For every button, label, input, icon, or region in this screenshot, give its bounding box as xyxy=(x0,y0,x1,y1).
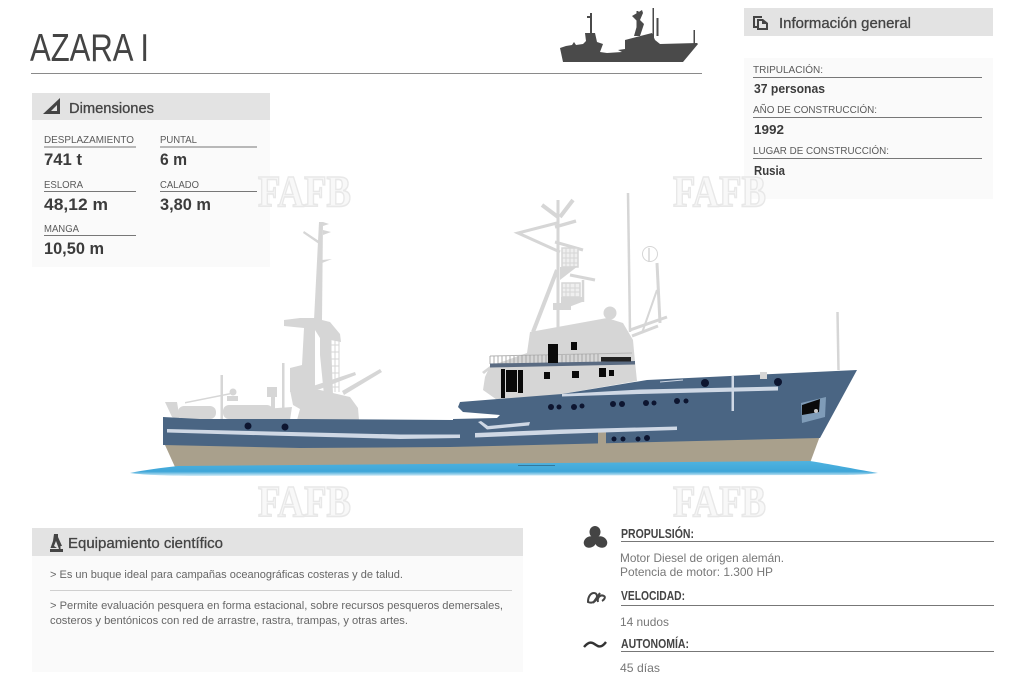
field: ano de construccion xyxy=(753,103,982,137)
mast platforms xyxy=(553,248,582,310)
text: motor: Motor Diesel de origen alemán. xyxy=(620,551,784,565)
heading: propulsion: PROPULSIÓN: xyxy=(621,526,694,541)
watermark: FAFB bottom left: FAFB xyxy=(258,477,351,526)
icon: microscope xyxy=(50,534,63,552)
field: eslora: 48,12 m xyxy=(44,196,108,214)
section: autonomia xyxy=(584,636,994,675)
text: evaluacion: costeros y bentónicos con red de arrastre, rastra, trampas, y otras artes. xyxy=(50,615,408,627)
field: tripulacion: TRIPULACIÓN: xyxy=(753,63,823,76)
ship illustration xyxy=(130,193,878,476)
hull upper: blue xyxy=(163,370,857,448)
field: calado: CALADO xyxy=(160,179,199,191)
field: lugar de construccion: Rusia xyxy=(754,163,786,178)
windows xyxy=(501,342,614,398)
watermark: FAFB bottom right: FAFB xyxy=(673,477,766,526)
keel shadow xyxy=(518,465,555,466)
field: manga xyxy=(44,223,136,258)
field: manga: MANGA xyxy=(44,223,79,235)
superstructure xyxy=(482,306,637,402)
panel: equipamiento cientifico xyxy=(32,528,523,672)
field: desplazamiento xyxy=(44,134,136,169)
field: ano de construccion: AÑO DE CONSTRUCCIÓN: xyxy=(753,103,877,116)
field: tripulacion xyxy=(753,63,982,96)
watermark: FAFB top left: FAFB xyxy=(258,167,351,216)
field: manga: 10,50 m xyxy=(44,240,104,258)
tan tab xyxy=(598,431,606,445)
icon: wave xyxy=(584,642,606,647)
text: evaluacion: > Permite evaluación pesquera en forma estacional, sobre recursos pesqueros demersales, xyxy=(50,600,503,612)
heading: dimensiones: Dimensiones xyxy=(69,100,154,117)
field: eslora: ESLORA xyxy=(44,179,83,191)
field: lugar de construccion: LUGAR DE CONSTRUCCIÓN: xyxy=(753,144,889,157)
section: propulsion xyxy=(582,526,994,579)
heading: informacion general: Información general xyxy=(779,15,911,32)
anchor hawse xyxy=(801,397,826,423)
field: ano de construccion: 1992 xyxy=(754,122,784,137)
section: velocidad xyxy=(588,589,994,629)
field: eslora xyxy=(44,179,136,214)
heading: equipamiento cientifico: Equipamiento científico xyxy=(68,535,223,552)
text: motor xyxy=(620,551,784,579)
icon: documents xyxy=(753,16,768,30)
icon: propeller xyxy=(582,526,609,550)
hull stripes xyxy=(167,372,778,439)
text: evaluacion xyxy=(50,600,503,627)
watermark: FAFB top right: FAFB xyxy=(673,167,766,216)
field: tripulacion: 37 personas xyxy=(754,81,825,96)
portholes xyxy=(244,378,782,442)
icon: ship silhouette xyxy=(560,8,698,62)
field: puntal: 6 m xyxy=(160,151,187,169)
text: motor: Potencia de motor: 1.300 HP xyxy=(620,565,773,579)
field: calado xyxy=(160,179,257,214)
field: calado: 3,80 m xyxy=(160,196,211,214)
aft mast and gantry xyxy=(165,222,382,420)
panel: informacion general xyxy=(744,8,993,199)
field: puntal: PUNTAL xyxy=(160,134,197,146)
text: nudos: 14 nudos xyxy=(620,615,669,629)
text: dias: 45 días xyxy=(620,661,660,675)
hull lower: tan xyxy=(165,436,820,467)
panel: dimensiones xyxy=(32,93,270,267)
field: desplazamiento: DESPLAZAMIENTO xyxy=(44,134,134,146)
icon: speedometer xyxy=(588,593,605,603)
title: AZARA I xyxy=(30,27,149,70)
field: desplazamiento: 741 t xyxy=(44,151,83,169)
field: lugar de construccion xyxy=(753,144,982,178)
text: campanas: > Es un buque ideal para campañas oceanográficas costeras y de talud. xyxy=(50,569,403,581)
fore mast xyxy=(518,193,838,370)
icon: set square xyxy=(43,98,60,114)
heading: velocidad: VELOCIDAD: xyxy=(621,589,685,603)
field: puntal xyxy=(160,134,257,169)
railing xyxy=(490,353,635,368)
gantry lattice xyxy=(331,338,339,392)
heading: autonomia: AUTONOMÍA: xyxy=(621,636,689,651)
water xyxy=(130,461,878,476)
